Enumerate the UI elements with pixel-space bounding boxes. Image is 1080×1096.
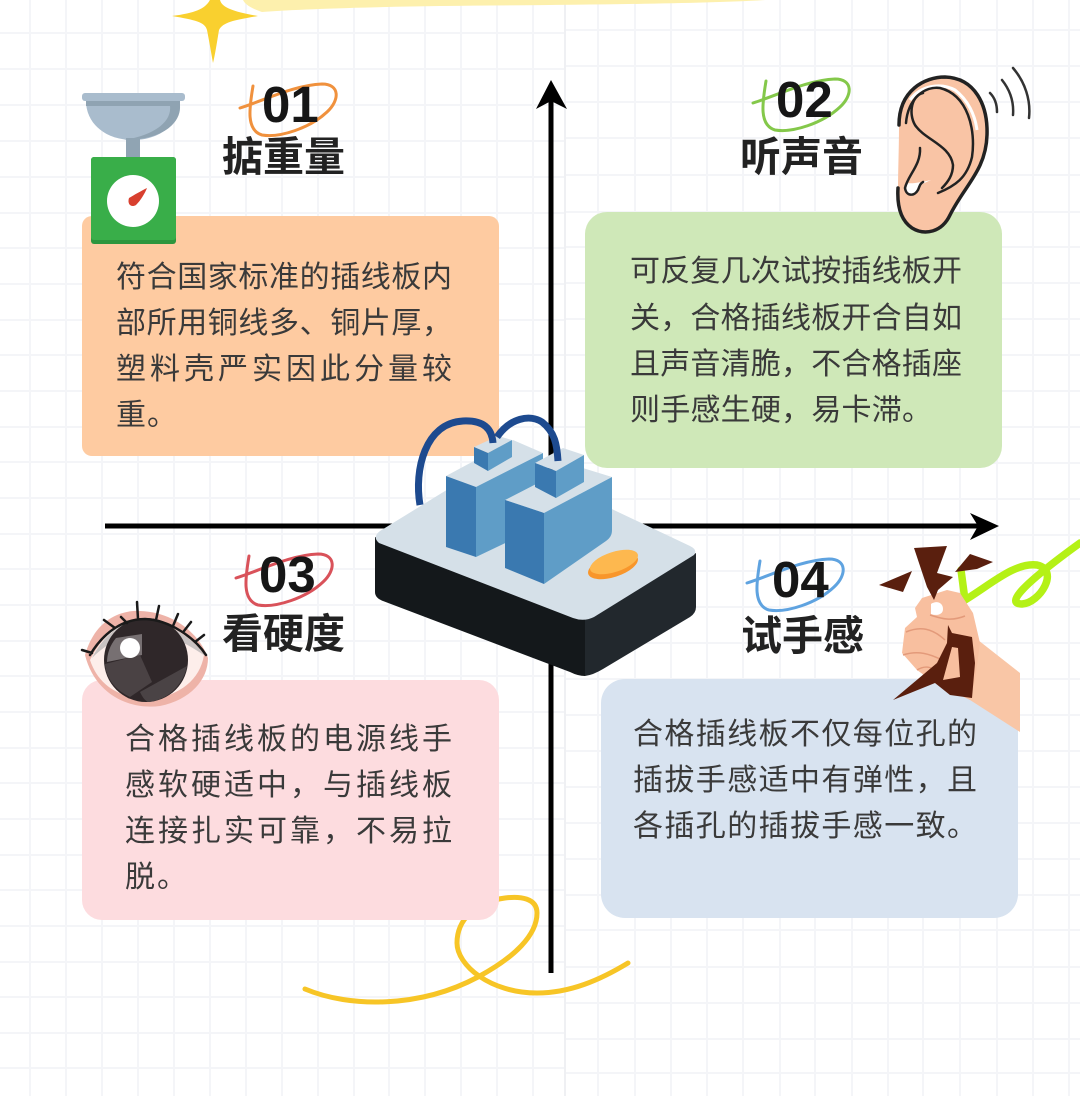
body text	[116, 261, 452, 432]
base top plate	[376, 458, 695, 620]
panel 02: listen	[585, 212, 1002, 468]
highlight	[120, 638, 140, 658]
thumb nail	[931, 602, 943, 615]
body text: 脱。	[125, 861, 187, 894]
title: 看硬度	[222, 611, 345, 657]
left drop	[879, 571, 912, 592]
iris lower right	[140, 666, 187, 702]
decoration: yellow star	[172, 0, 258, 63]
icon: kitchen scale	[82, 93, 185, 244]
lower stroke	[893, 625, 975, 700]
body text: 符合国家标准的插线板内	[116, 261, 452, 294]
icon: ear with sound waves	[898, 68, 1029, 232]
vertical axis arrow	[536, 80, 567, 973]
heading 04	[741, 551, 864, 659]
ear antihelix	[912, 93, 953, 188]
body text: 连接扎实可靠，不易拉	[125, 815, 452, 848]
top stroke	[914, 546, 953, 600]
back plug	[474, 436, 512, 471]
body text: 关，合格插线板开合自如	[630, 302, 962, 335]
number: 01	[262, 76, 319, 133]
fist	[902, 590, 980, 700]
ear outline	[898, 77, 987, 232]
number: 03	[259, 546, 316, 603]
heading 03	[222, 546, 345, 657]
card background	[82, 680, 499, 920]
orange button	[585, 545, 641, 584]
body text: 感软硬适中，与插线板	[125, 769, 452, 802]
body text: 重。	[116, 399, 177, 432]
heading 01	[222, 76, 345, 180]
panel 01: weigh	[82, 216, 499, 456]
body text: 合格插线板的电源线手	[125, 723, 452, 756]
horizontal axis arrow	[105, 513, 999, 540]
ear shape	[898, 77, 987, 232]
number: 04	[772, 551, 829, 608]
cable right	[497, 418, 558, 461]
ear helix	[906, 88, 973, 193]
heading 02	[740, 71, 863, 180]
ear concha white	[906, 180, 931, 195]
body text	[125, 723, 452, 894]
scribble	[753, 79, 849, 131]
arm	[950, 640, 1020, 732]
iris light band	[107, 634, 142, 662]
body text: 插拔手感适中有弹性，且	[633, 764, 977, 797]
title: 听声音	[740, 134, 863, 180]
card background	[585, 212, 1002, 468]
icon: eye	[82, 602, 208, 707]
sound waves	[990, 68, 1029, 118]
body text: 塑料壳严实因此分量较	[116, 353, 452, 386]
body text: 部所用铜线多、铜片厚，	[116, 307, 452, 340]
finger lines	[903, 615, 965, 672]
scribble	[236, 554, 332, 606]
dial	[107, 175, 159, 227]
stem	[126, 138, 140, 158]
needle	[128, 188, 147, 206]
lid shadow	[92, 620, 205, 658]
title: 试手感	[741, 613, 864, 659]
bowl	[86, 99, 180, 140]
title: 掂重量	[222, 134, 345, 180]
panel 03: hardness	[82, 680, 499, 920]
base right side	[585, 553, 696, 676]
right drop	[955, 554, 993, 572]
decoration: yellow brush stroke	[243, 0, 765, 12]
cable left	[418, 421, 493, 505]
card background	[601, 679, 1018, 918]
body text: 可反复几次试按插线板开	[630, 255, 962, 288]
rim	[82, 93, 185, 101]
body text	[630, 255, 962, 427]
iris	[104, 618, 188, 702]
number: 02	[776, 71, 833, 128]
decoration: yellow squiggle	[305, 897, 628, 1002]
panel 04: feel	[601, 679, 1018, 918]
front plug	[535, 448, 584, 498]
iris lower left	[105, 655, 152, 697]
scribble	[747, 559, 843, 611]
scale body	[91, 157, 176, 244]
back block	[446, 440, 543, 557]
card background	[82, 216, 499, 456]
ear concha line	[905, 148, 923, 195]
decoration: lime squiggle	[961, 543, 1080, 604]
body text: 且声音清脆，不合格插座	[630, 348, 962, 381]
sclera	[90, 620, 204, 700]
body text	[633, 718, 977, 843]
icon: power strip illustration	[375, 418, 696, 676]
eyelashes	[82, 602, 206, 655]
front block	[505, 465, 612, 584]
icon: fist with brown glyph	[879, 546, 1020, 732]
body text: 则手感生硬，易卡滞。	[630, 394, 932, 427]
body text: 各插孔的插拔手感一致。	[633, 810, 977, 843]
base left side	[375, 537, 585, 676]
pink lid	[85, 611, 208, 707]
scribble	[240, 84, 336, 136]
body text: 合格插线板不仅每位孔的	[633, 718, 977, 751]
ear white rim	[910, 86, 977, 130]
